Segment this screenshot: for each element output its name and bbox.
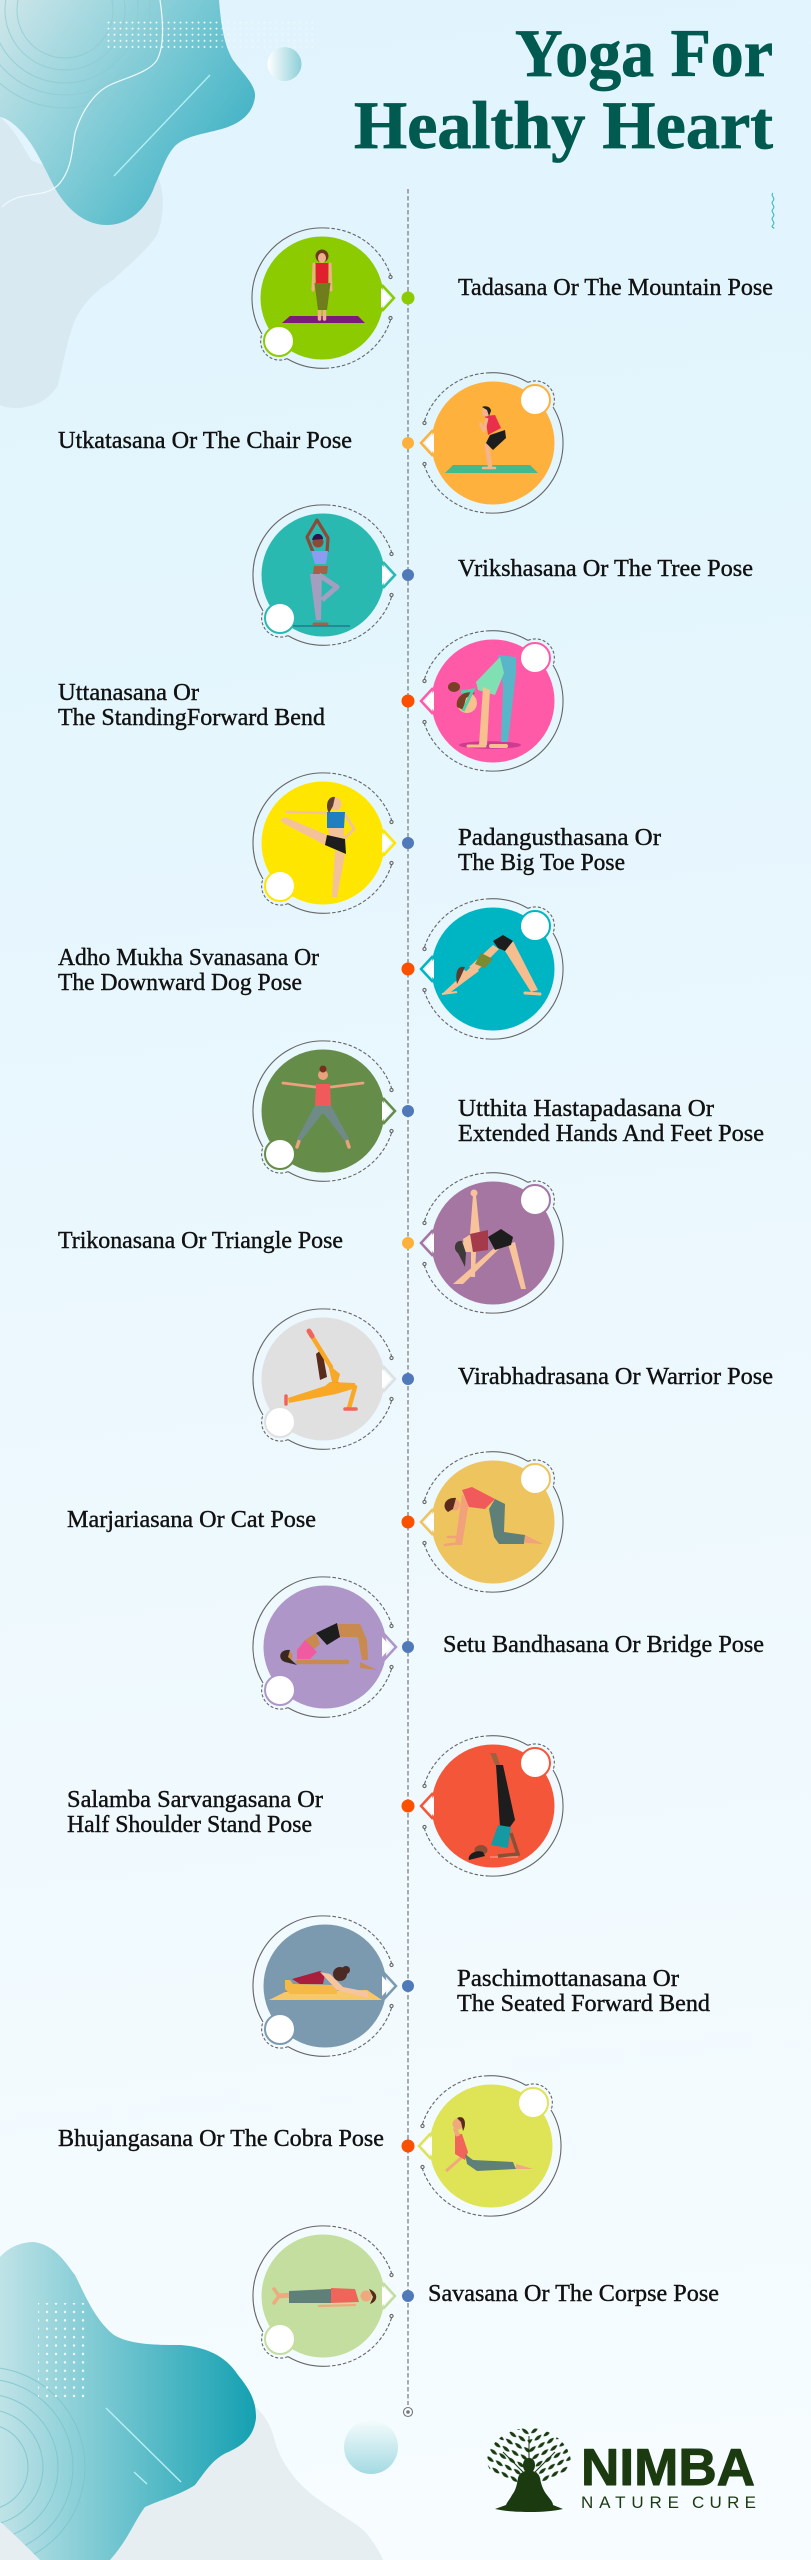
dot: Padangusthasana: [402, 837, 414, 849]
grey background blob, top left: [0, 117, 163, 408]
grey background blob, bottom: [0, 2395, 383, 2560]
label: Trikonasana: Trikonasana Or Triangle Pose: [58, 1228, 343, 1254]
label: Salamba Sarvangasana: Salamba Sarvangasana Or: [67, 1787, 323, 1813]
title: Yoga For: [515, 15, 773, 91]
teal blob, top left: [0, 0, 255, 225]
pose: Setu Bandhasana: [253, 1577, 396, 1717]
pose: Marjariasana: [421, 1452, 563, 1592]
pose: Paschimottanasana: [253, 1916, 396, 2056]
dot: Setu Bandhasana: [402, 1641, 414, 1653]
label: Salamba Sarvangasana: [67, 1787, 323, 1838]
dot: Salamba Sarvangasana: [402, 1800, 414, 1812]
label: Salamba Sarvangasana: Half Shoulder Stand Pose: [67, 1812, 312, 1838]
label: Setu Bandhasana: Setu Bandhasana Or Bridge Pose: [443, 1632, 764, 1658]
label: Uttanasana: Uttanasana Or: [58, 680, 199, 706]
dot pattern, bottom: [38, 2303, 86, 2403]
pose: Padangusthasana: [253, 773, 395, 913]
dot: Uttanasana: [402, 694, 414, 708]
pose: Virabhadrasana: [253, 1309, 395, 1449]
wordmark: NIMBA: [581, 2439, 755, 2497]
dot: Marjariasana: [402, 1516, 414, 1528]
label: Marjariasana: Marjariasana Or Cat Pose: [67, 1507, 316, 1533]
label: Uttanasana: [58, 680, 325, 731]
label: Utkatasana: Utkatasana Or The Chair Pose: [58, 428, 352, 454]
label: Paschimottanasana: The Seated Forward Bend: [457, 1991, 710, 2017]
logo: Nimba Nature Cure: [487, 2428, 756, 2512]
label: Bhujangasana: Bhujangasana Or The Cobra Pose: [58, 2126, 384, 2152]
label: Padangusthasana: The Big Toe Pose: [458, 850, 625, 876]
pose: Savasana: [253, 2226, 395, 2366]
dot: Virabhadrasana: [402, 1373, 414, 1385]
label: Padangusthasana: Padangusthasana Or: [458, 825, 661, 851]
timeline line: [404, 189, 412, 2416]
dot: Vrikshasana: [402, 569, 414, 581]
decorative sphere, top: [268, 47, 302, 81]
pose: Salamba Sarvangasana: [421, 1736, 563, 1876]
label: Adho Mukha Svanasana: Adho Mukha Svanasana Or: [58, 945, 319, 971]
teal blob, bottom left: [0, 2242, 256, 2560]
label: Utthita Hastapadasana: Extended Hands And Feet Pose: [458, 1121, 764, 1147]
dot: Savasana: [402, 2290, 414, 2302]
pose: Utthita Hastapadasana: [253, 1041, 395, 1181]
dot: Utkatasana: [402, 437, 414, 449]
pose: Tadasana: [252, 228, 394, 368]
pose: Utkatasana: [421, 373, 563, 513]
label: Tadasana: Tadasana Or The Mountain Pose: [458, 275, 773, 301]
label: Paschimottanasana: [457, 1966, 710, 2017]
pose: Uttanasana: [421, 631, 563, 771]
dot: Paschimottanasana: [402, 1980, 414, 1992]
pose: Bhujangasana: [419, 2076, 561, 2216]
title: [354, 15, 773, 163]
label: Vrikshasana: Vrikshasana Or The Tree Pose: [458, 556, 753, 582]
dot: Utthita Hastapadasana: [402, 1105, 414, 1117]
decorative sphere, bottom: [344, 2420, 398, 2474]
label: Utthita Hastapadasana: [458, 1096, 764, 1147]
label: Uttanasana: The StandingForward Bend: [58, 705, 325, 731]
label: Adho Mukha Svanasana: The Downward Dog Pose: [58, 970, 302, 996]
wordmark: CURE: [692, 2493, 756, 2512]
title: Healthy Heart: [354, 87, 773, 163]
label: Utthita Hastapadasana: Utthita Hastapadasana Or: [458, 1096, 714, 1122]
wordmark: NATURE: [581, 2493, 679, 2512]
pose: Trikonasana: [421, 1173, 563, 1313]
dot: Tadasana: [402, 292, 414, 304]
squiggle, top right: [772, 193, 774, 228]
icon: tree and meditating figure: [487, 2428, 571, 2512]
label: Virabhadrasana: Virabhadrasana Or Warrior Pose: [458, 1364, 773, 1390]
pose: Adho Mukha Svanasana: [421, 899, 563, 1039]
label: Paschimottanasana: Paschimottanasana Or: [457, 1966, 679, 1992]
pose: Vrikshasana: [253, 505, 395, 645]
dot: Trikonasana: [402, 1237, 414, 1249]
label: Adho Mukha Svanasana: [58, 945, 319, 996]
dot: Adho Mukha Svanasana: [402, 962, 414, 976]
dot: Bhujangasana: [402, 2140, 414, 2152]
label: Savasana: Savasana Or The Corpse Pose: [428, 2281, 719, 2307]
label: Padangusthasana: [458, 825, 661, 876]
dot pattern, top: [107, 21, 318, 49]
